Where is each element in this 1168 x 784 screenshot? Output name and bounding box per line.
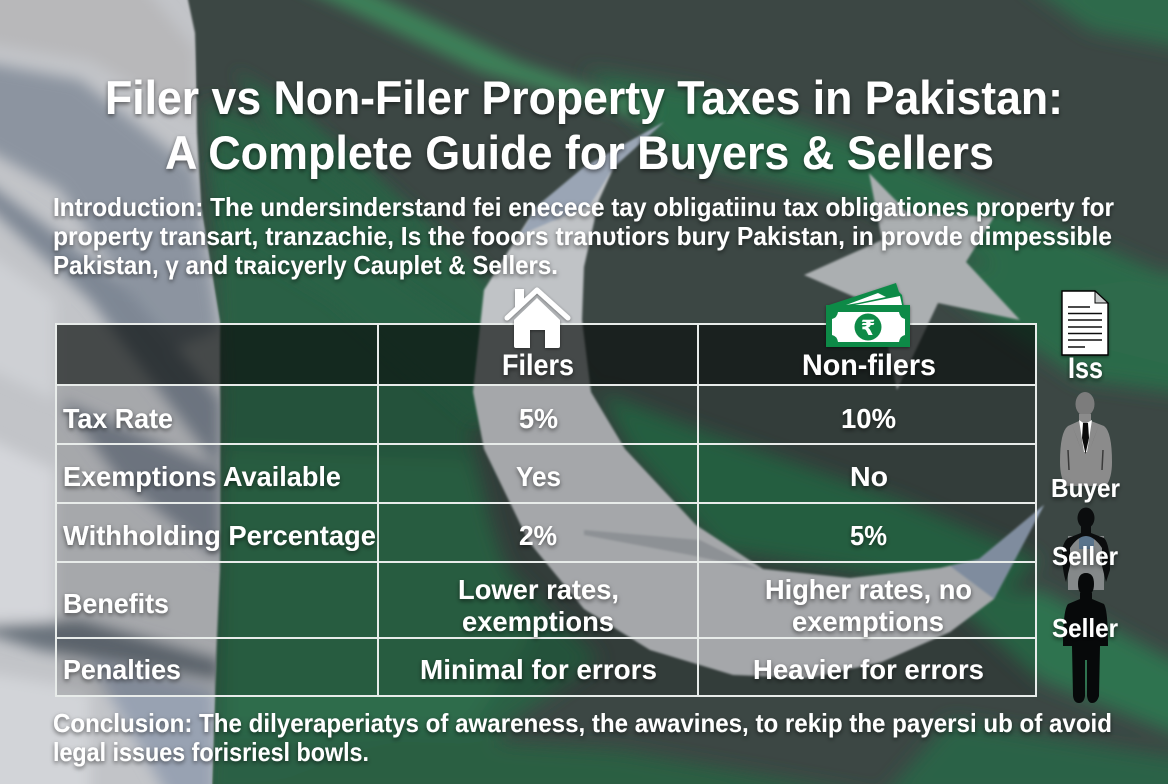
icon: seller figure two (1063, 573, 1108, 703)
introduction text (53, 192, 1114, 280)
label: Iss: Iss (1068, 352, 1103, 385)
row: penalties: Penalties (63, 654, 181, 685)
icon: buyer figure (1060, 392, 1112, 486)
row: withholding percentage (63, 520, 887, 551)
row: penalties (63, 654, 984, 685)
icon: rupee banknotes: ₹ (861, 316, 875, 340)
icon: rupee banknotes (826, 283, 910, 347)
row: tax rate: Tax Rate (63, 403, 173, 434)
row: exemptions available: Exemptions Available (63, 461, 341, 492)
conclusion text: legal issues forisriesl bowls. (53, 737, 369, 767)
conclusion text (53, 708, 1112, 767)
introduction text: property transart, tranzachie, Is the fooors tranυtiors bury Pakistan, in provde dimpessible (53, 221, 1112, 251)
row: withholding percentage: 5% (850, 520, 887, 551)
row: tax rate: 10% (841, 403, 896, 434)
title: Filer vs Non-Filer Property Taxes in Pakistan: (105, 71, 1063, 124)
column headers (502, 349, 936, 382)
column headers: Filers (502, 349, 574, 382)
introduction text: Introduction: The undersinderstand fei enecece tay obligatiinu tax obligationes property for (53, 192, 1114, 222)
row: benefits: exemptions (792, 606, 944, 637)
table header band (56, 324, 1036, 385)
row: benefits: Higher rates, no (765, 574, 972, 605)
label: Seller (first): Seller (1052, 541, 1118, 571)
row: exemptions available (63, 461, 888, 492)
row: exemptions available: Yes (516, 461, 561, 492)
row: withholding percentage: Withholding Percentage (63, 520, 376, 551)
crescent (473, 122, 1044, 678)
table body shading (56, 385, 1036, 696)
row: benefits (63, 574, 972, 637)
title: A Complete Guide for Buyers & Sellers (165, 126, 994, 179)
row: withholding percentage: 2% (519, 520, 557, 551)
table grid (56, 324, 1036, 696)
row: tax rate (63, 403, 896, 434)
white hoist band (0, 0, 220, 784)
star (804, 173, 1020, 390)
label: Buyer: Buyer (1051, 473, 1120, 503)
column headers: Non-filers (802, 349, 936, 382)
title (105, 71, 1063, 179)
row: benefits: exemptions (462, 606, 614, 637)
label: Seller (second): Seller (1052, 613, 1118, 643)
icon: document (1062, 291, 1108, 355)
row: penalties: Minimal for errors (420, 654, 657, 685)
row: benefits: Lower rates, (458, 574, 619, 605)
row: tax rate: 5% (519, 403, 558, 434)
icon: house (507, 289, 568, 348)
introduction text: Pakistan, γ and tʀaicyerly Cauplet & Sellers. (53, 250, 558, 280)
row: penalties: Heavier for errors (753, 654, 984, 685)
comparison table (56, 324, 1036, 696)
conclusion text: Conclusion: The dilyeraperiatys of awareness, the awavines, to rekip the payersi ub of avoid (53, 708, 1112, 738)
row: benefits: Benefits (63, 588, 169, 619)
icon: seller figure one (1062, 508, 1110, 590)
row: exemptions available: No (850, 461, 888, 492)
